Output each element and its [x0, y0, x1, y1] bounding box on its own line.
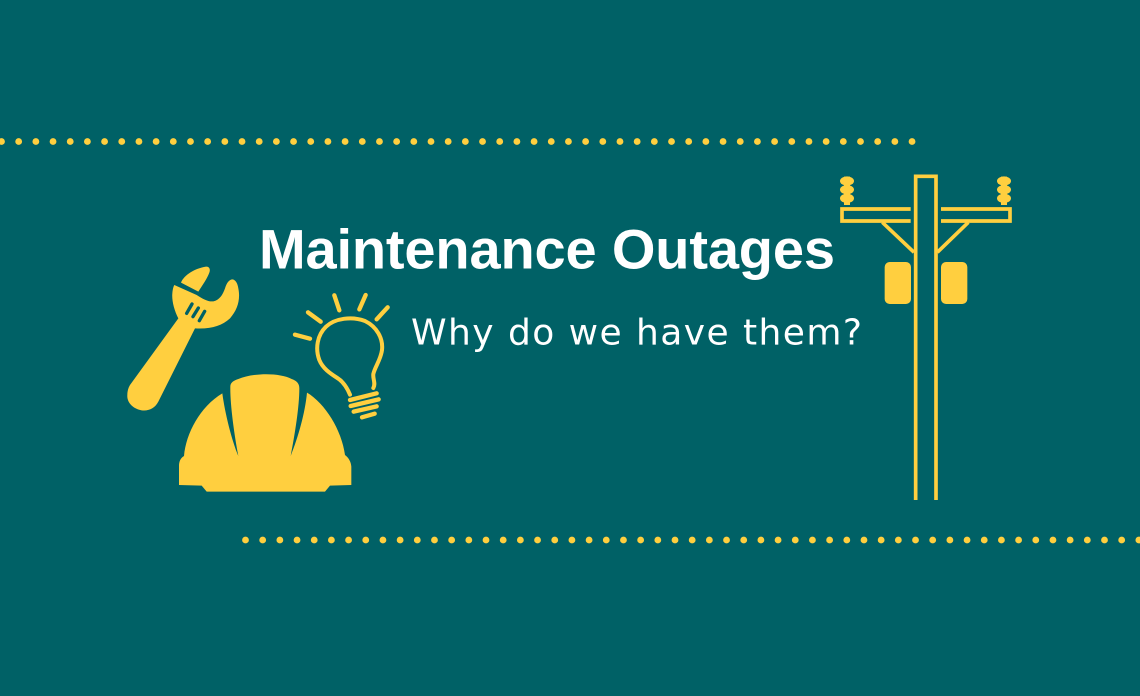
title: Maintenance Outages — [259, 218, 835, 280]
icon: hard hat — [179, 374, 351, 492]
icon: wrench — [127, 267, 239, 411]
icon: utility pole — [840, 176, 1011, 500]
icon: light bulb — [295, 295, 388, 417]
subtitle: Why do we have them? — [411, 313, 862, 354]
